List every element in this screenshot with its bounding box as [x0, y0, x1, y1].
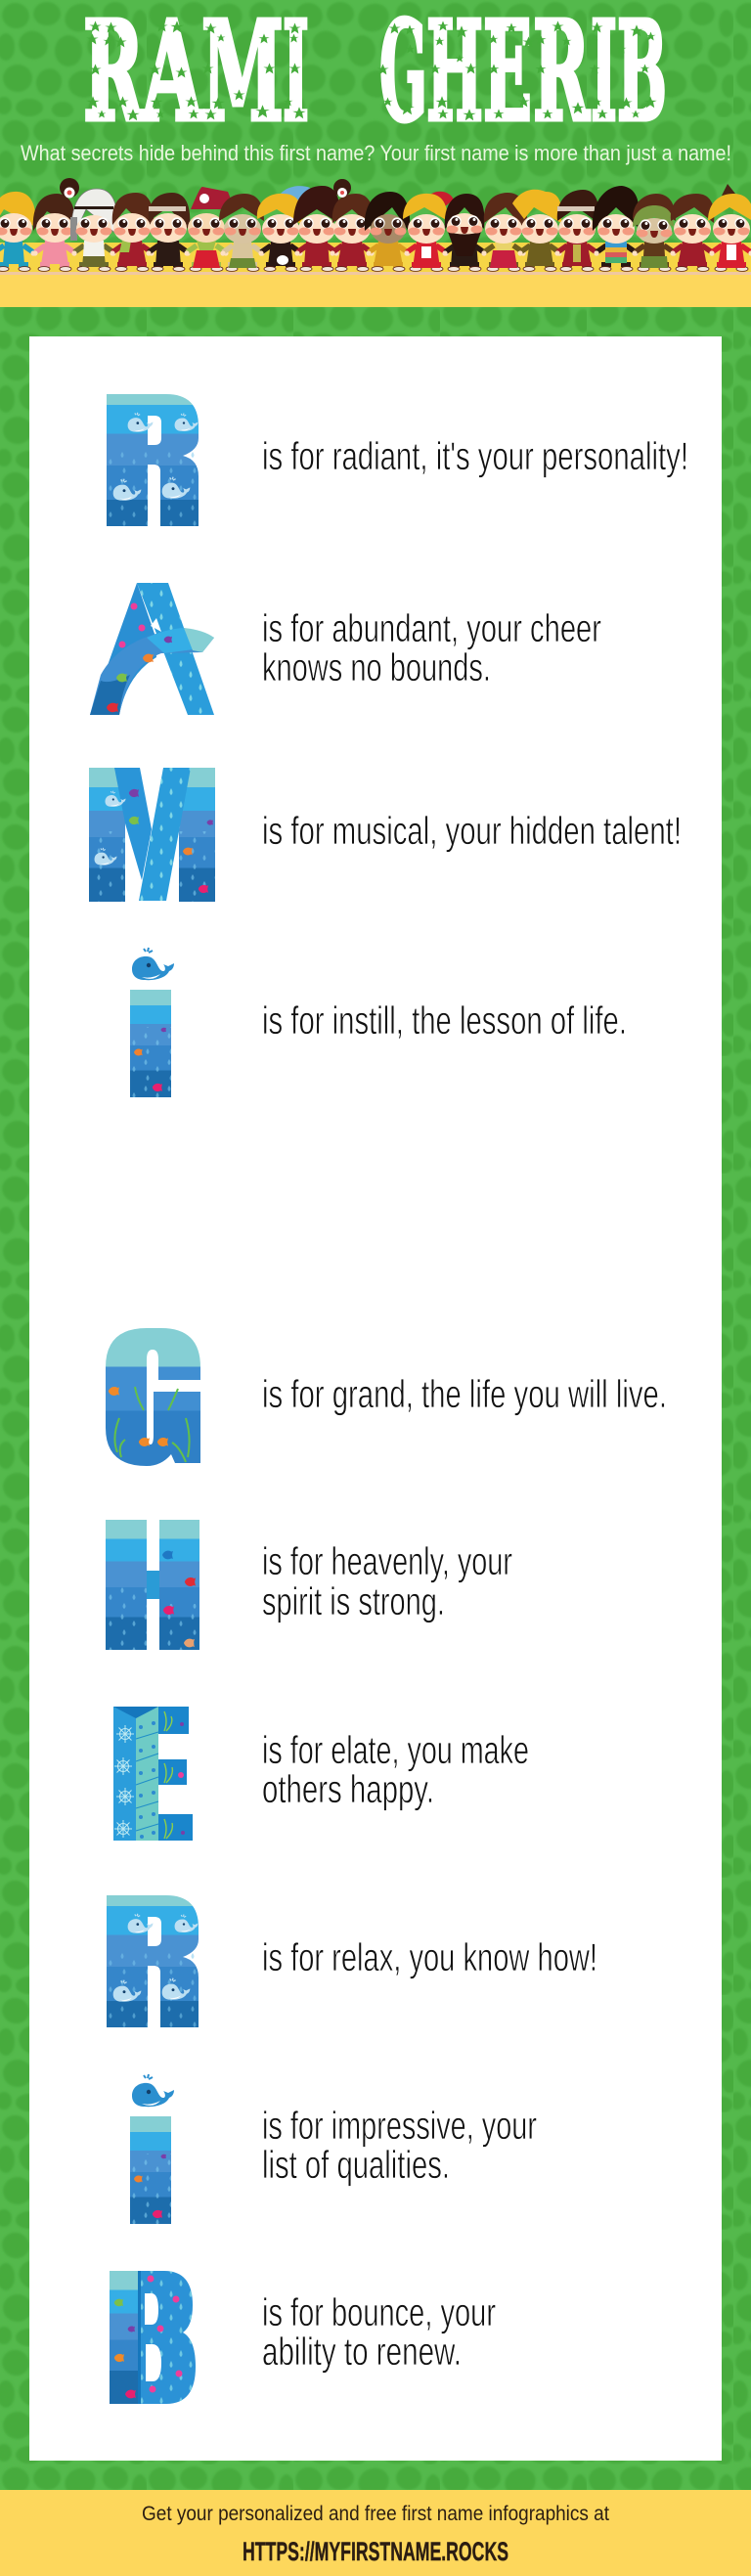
kid 7 — [219, 194, 265, 271]
kid 11 — [365, 192, 411, 271]
kid 19 — [670, 194, 715, 271]
footer band — [0, 2490, 751, 2576]
kid 8 — [257, 186, 310, 271]
kid 6 — [184, 187, 232, 271]
footer text: Get your personalized and free first name infographics at — [142, 2503, 609, 2525]
row of cartoon kids holding hands — [0, 178, 751, 271]
row A: letter and text — [90, 583, 601, 715]
text line 2: others happy. — [262, 1768, 434, 1811]
row M: letter and text — [89, 768, 682, 902]
kid 2 — [32, 178, 79, 271]
kid 18 — [632, 194, 677, 271]
main white panel — [29, 336, 722, 2461]
row I second: letter and text — [130, 2074, 537, 2224]
row H: letter and text — [106, 1520, 512, 1650]
icon: letter G — [106, 1328, 200, 1466]
text: is for bounce, your — [262, 2291, 496, 2334]
kid 1 — [0, 192, 36, 271]
icon: letter H — [106, 1520, 199, 1650]
kid 17 — [593, 186, 639, 271]
kid 9 — [293, 186, 339, 271]
kid 20 — [708, 184, 751, 271]
icon: letter R — [107, 1895, 199, 2027]
icon: letter I with whale — [130, 948, 174, 1097]
kid 14 — [481, 193, 527, 271]
icon: letter E — [113, 1707, 193, 1841]
text: is for instill, the lesson of life. — [262, 999, 627, 1043]
row G: letter and text — [106, 1328, 667, 1466]
text line 2: knows no bounds. — [262, 646, 491, 689]
kid 12 — [403, 192, 454, 271]
yellow banner behind the kids — [0, 243, 751, 307]
row I: letter and text — [130, 948, 627, 1097]
row R second: letter and text — [107, 1895, 597, 2027]
row R: letter and text — [107, 394, 688, 526]
kid 16 — [554, 190, 599, 271]
text: is for elate, you make — [262, 1729, 529, 1772]
text: is for impressive, your — [262, 2105, 537, 2148]
kid 13 — [442, 194, 487, 271]
header title: RAMI GHERIB in star-filled western letters — [83, 0, 667, 153]
icon: letter R — [107, 394, 199, 526]
row E: letter and text — [113, 1707, 529, 1841]
footer url: HTTPS://MYFIRSTNAME.ROCKS — [243, 2537, 508, 2566]
icon: letter M — [89, 768, 215, 902]
icon: letter B — [110, 2271, 196, 2404]
kid 3 — [70, 189, 117, 271]
text line 2: spirit is strong. — [262, 1580, 445, 1623]
text: is for abundant, your cheer — [262, 607, 601, 650]
icon: letter I with whale — [130, 2074, 174, 2224]
text line 2: list of qualities. — [262, 2144, 450, 2187]
kid 4 — [110, 193, 155, 271]
row B: letter and text — [110, 2271, 496, 2404]
text line 2: ability to renew. — [262, 2331, 462, 2374]
icon: letter A — [90, 583, 214, 715]
kid 5 — [146, 193, 191, 271]
kid 15 — [512, 190, 562, 271]
text: is for relax, you know how! — [262, 1936, 597, 1979]
kid 10 — [330, 179, 375, 271]
text: is for heavenly, your — [262, 1540, 512, 1583]
